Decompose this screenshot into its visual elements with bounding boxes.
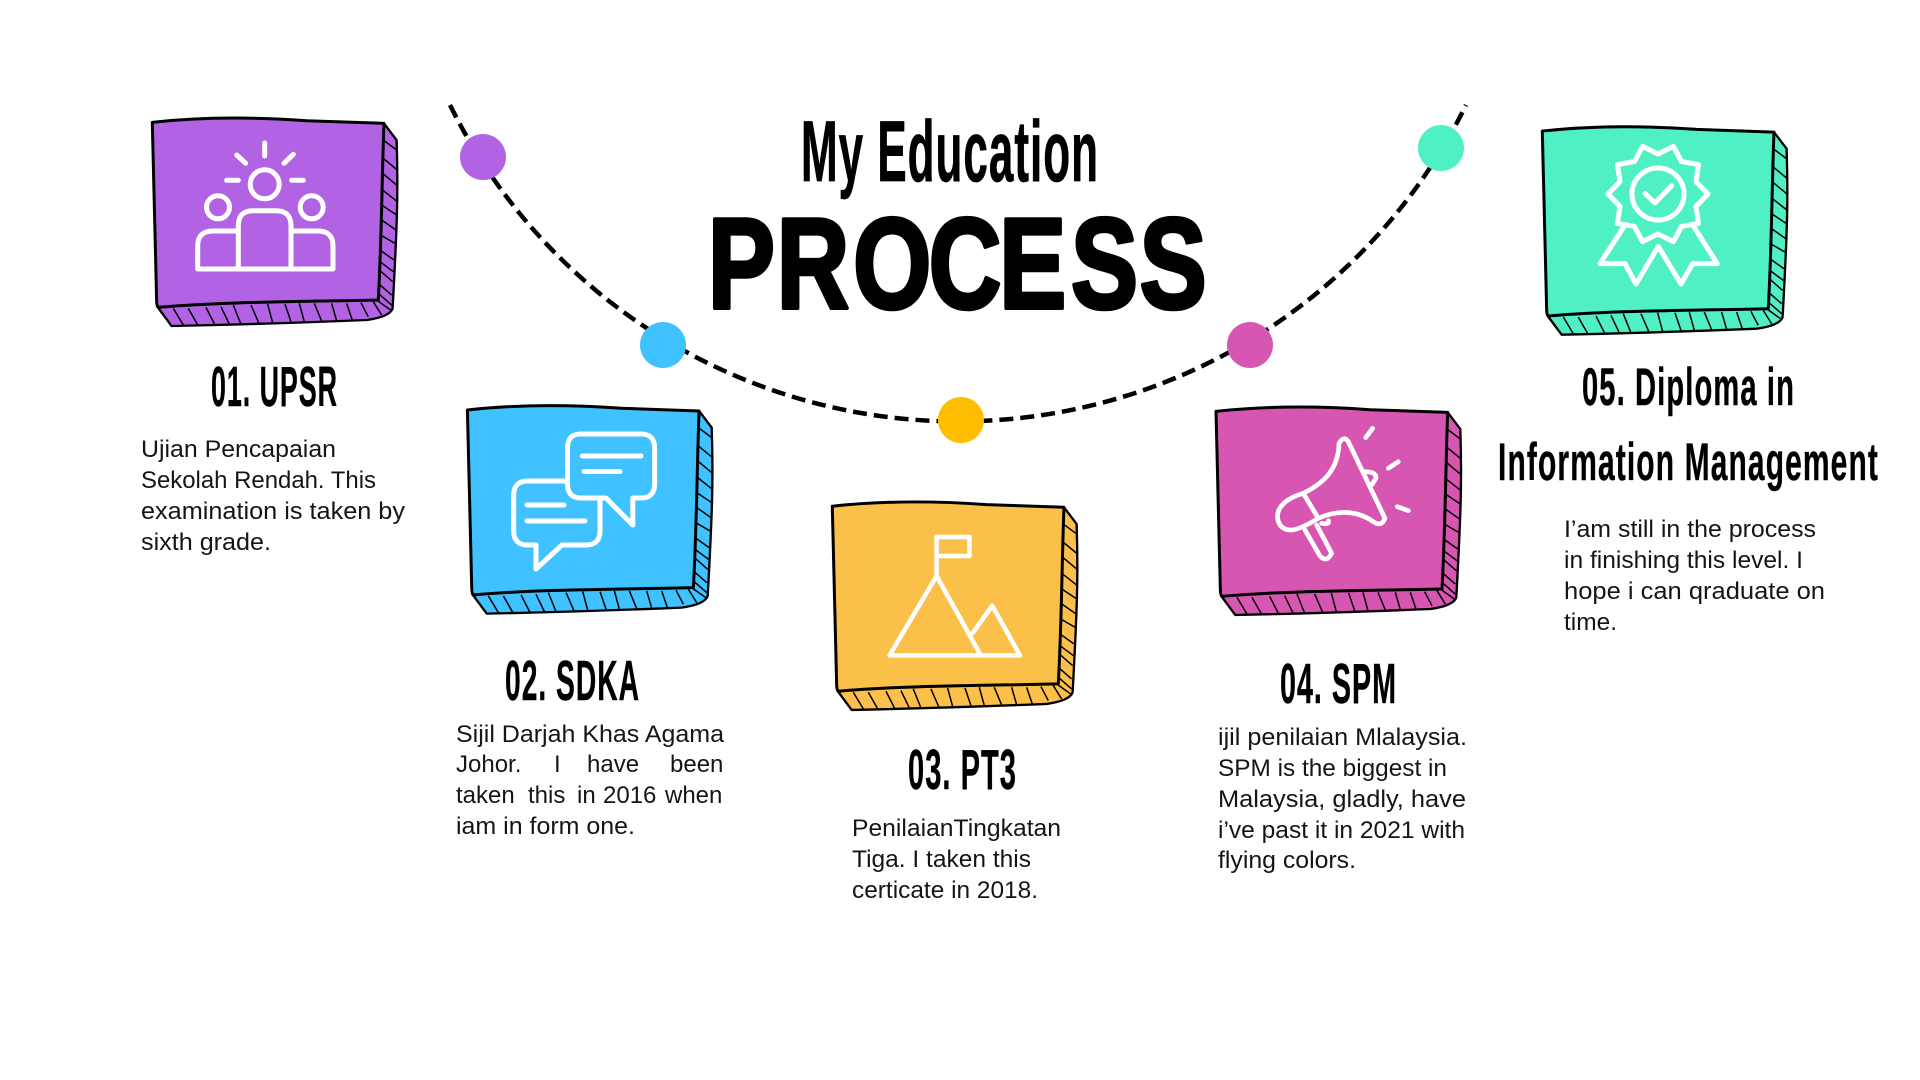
description bbox=[852, 815, 1061, 904]
timeline dots bbox=[460, 125, 1464, 443]
description: when bbox=[664, 782, 722, 809]
step 4: SPM bbox=[1216, 407, 1467, 874]
icon: mountain with flag bbox=[890, 537, 1020, 655]
title line: PROCESS: PROCESS bbox=[708, 191, 1207, 336]
description: PenilaianTingkatan bbox=[852, 815, 1061, 842]
description: ijil penilaian Mlalaysia. bbox=[1218, 724, 1467, 751]
description: Ujian Pencapaian bbox=[141, 436, 336, 463]
description: SPM is the biggest in bbox=[1218, 755, 1447, 782]
description: Malaysia, gladly, have bbox=[1218, 786, 1466, 813]
description: Tiga. I taken this bbox=[852, 846, 1031, 873]
title bbox=[708, 104, 1207, 336]
purple sketch box bbox=[152, 118, 397, 326]
description: 2016 bbox=[603, 782, 656, 809]
description: Sekolah Rendah. This bbox=[141, 467, 376, 494]
title line: My Education: My Education bbox=[801, 104, 1099, 200]
description: this bbox=[528, 782, 565, 809]
description: flying colors. bbox=[1218, 847, 1356, 874]
icon: award ribbon bbox=[1600, 146, 1717, 284]
description: I bbox=[554, 751, 561, 778]
description bbox=[1564, 516, 1825, 636]
description: been bbox=[670, 751, 723, 778]
icon: people group bbox=[198, 143, 333, 269]
pink sketch box bbox=[1216, 407, 1461, 615]
description bbox=[456, 721, 725, 840]
step 2: SDKA: 02. SDKA bbox=[505, 649, 640, 713]
description: iam in form one. bbox=[456, 813, 635, 840]
step 5: Diploma bbox=[1498, 127, 1879, 636]
description: certicate in 2018. bbox=[852, 877, 1038, 904]
description bbox=[141, 436, 405, 556]
teal sketch box bbox=[1542, 127, 1787, 335]
description: in finishing this level. I bbox=[1564, 547, 1803, 574]
yellow sketch box bbox=[832, 502, 1077, 710]
description: examination is taken by bbox=[141, 498, 405, 525]
description: Johor. bbox=[456, 751, 521, 778]
description: time. bbox=[1564, 609, 1617, 636]
step 1: UPSR bbox=[141, 118, 405, 556]
description: i’ve past it in 2021 with bbox=[1218, 817, 1465, 844]
description: hope i can qraduate on bbox=[1564, 578, 1825, 605]
icon: speech bubbles bbox=[514, 434, 655, 569]
heading: 04. SPM bbox=[1280, 652, 1397, 716]
description bbox=[1218, 724, 1467, 874]
step 1: UPSR: 01. UPSR bbox=[211, 355, 338, 419]
heading bbox=[1498, 358, 1879, 492]
step 2: SDKA bbox=[456, 406, 725, 840]
description: have bbox=[587, 751, 639, 778]
icon: megaphone bbox=[1278, 428, 1408, 559]
description: taken bbox=[456, 782, 515, 809]
description: sixth grade. bbox=[141, 529, 271, 556]
blue sketch box bbox=[467, 406, 712, 614]
heading: 03. PT3 bbox=[908, 738, 1017, 802]
description: I’am still in the process bbox=[1564, 516, 1816, 543]
step 3: PT3 bbox=[832, 502, 1077, 904]
dashed arc connecting the steps bbox=[450, 105, 1466, 421]
description: in bbox=[577, 782, 596, 809]
description: Sijil Darjah Khas Agama bbox=[456, 721, 725, 748]
